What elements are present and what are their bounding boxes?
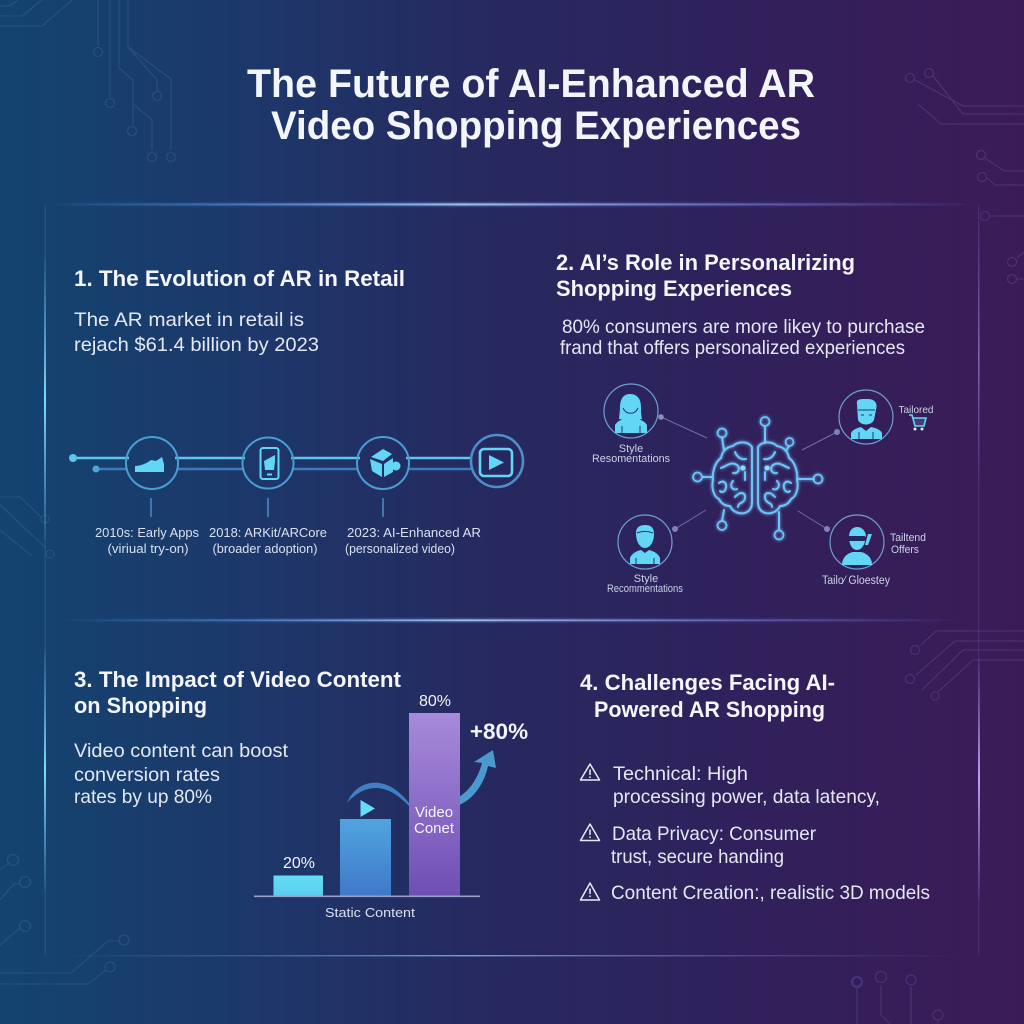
ticks bbox=[151, 498, 383, 517]
label: 2010s: 2010s: Early Apps bbox=[95, 525, 199, 540]
label: style recommendations top: Style bbox=[619, 443, 643, 455]
label: style recommendations top: Resomentations bbox=[592, 453, 670, 465]
value: 20%: 20% bbox=[283, 855, 315, 872]
label: video content: Conet bbox=[414, 820, 455, 837]
bar chart bbox=[254, 693, 528, 920]
text: AR market: rejach $61.4 billion by 2023 bbox=[74, 334, 319, 356]
label: tailored offers bbox=[890, 532, 926, 556]
label: video content: Video bbox=[415, 804, 453, 821]
icon: phone bbox=[260, 448, 278, 479]
bar: 20% bbox=[274, 876, 323, 896]
person: top right bbox=[839, 390, 893, 444]
circuit traces: top right bbox=[906, 68, 1024, 284]
heading 2: 2. AI’s Role in Personalrizing bbox=[556, 250, 855, 275]
label: tailored glossary: Tailo⁄ Gloestey bbox=[822, 575, 890, 587]
title: The Future of AI-Enhanced AR bbox=[247, 62, 815, 106]
heading 4: Powered AR Shopping bbox=[594, 697, 825, 722]
value: 80%: 80% bbox=[419, 693, 451, 710]
label: tailored offers: Tailtend bbox=[890, 532, 926, 544]
challenge: content creation: Content Creation:, realistic 3D models bbox=[611, 882, 930, 904]
label: static content: Static Content bbox=[325, 905, 415, 920]
text: video content: Video content can boost bbox=[74, 740, 289, 762]
panel 1: evolution of AR in retail bbox=[69, 266, 523, 556]
title: Video Shopping Experiences bbox=[271, 104, 801, 148]
heading 3 bbox=[74, 667, 401, 718]
icon: cube bbox=[370, 449, 400, 477]
heading 3: on Shopping bbox=[74, 693, 207, 718]
text: 80% consumers bbox=[560, 316, 925, 359]
label: video content bbox=[414, 804, 455, 837]
brain diagram bbox=[693, 417, 822, 540]
panel frame lines bbox=[44, 204, 980, 956]
text: 80% consumers: 80% consumers are more likey to purchase bbox=[562, 316, 925, 338]
label: tailored cart bbox=[898, 404, 934, 430]
challenge: data privacy bbox=[580, 823, 816, 868]
text: 80% consumers: frand that offers personalized experiences bbox=[560, 337, 905, 359]
bar: middle bbox=[340, 819, 391, 896]
panel 3: impact of video content bbox=[74, 667, 528, 920]
label: 2010s: (viriual try-on) bbox=[108, 541, 188, 556]
connector lines bbox=[658, 414, 840, 532]
challenge: data privacy: Data Privacy: Consumer bbox=[612, 823, 816, 845]
heading 2 bbox=[556, 250, 855, 301]
label: tailored offers: Offers bbox=[891, 544, 919, 556]
challenge: technical: Technical: High bbox=[613, 763, 748, 785]
label: style recommendations bottom: Style bbox=[634, 573, 658, 585]
text: AR market bbox=[74, 309, 319, 356]
panel 2: AI personalization bbox=[556, 250, 934, 595]
icon: play video bbox=[480, 449, 512, 476]
person: bottom left bbox=[618, 515, 672, 569]
bar: 80% bbox=[409, 713, 460, 896]
label: style recommendations bottom: Recommentations bbox=[607, 583, 683, 595]
arrow: curve bbox=[347, 783, 409, 806]
label: 2023: (personalized video) bbox=[345, 541, 455, 556]
person: bottom right bbox=[830, 515, 884, 569]
heading 2: Shopping Experiences bbox=[556, 276, 792, 301]
panel 4: challenges bbox=[580, 670, 930, 904]
label: 2010s bbox=[95, 525, 199, 556]
person: top left bbox=[604, 384, 658, 438]
icon: play bbox=[360, 800, 375, 817]
brain nodes bbox=[693, 417, 822, 540]
text: video content: rates by up 80% bbox=[74, 786, 212, 808]
label: 2018: (broader adoption) bbox=[212, 541, 318, 556]
heading 3: 3. The Impact of Video Content bbox=[74, 667, 401, 692]
circuit traces: top left bbox=[0, 0, 176, 162]
text: video content bbox=[74, 740, 289, 808]
right hemisphere bbox=[758, 442, 798, 513]
icon: shoe bbox=[135, 457, 164, 472]
challenge: technical: processing power, data latency, bbox=[613, 786, 880, 808]
timeline bbox=[69, 435, 523, 556]
label: 2018: 2018: ARKit/ARCore bbox=[209, 525, 327, 540]
label: 2023 bbox=[345, 525, 481, 556]
left hemisphere bbox=[712, 442, 752, 513]
label: 2018 bbox=[209, 525, 327, 556]
challenge: data privacy: trust, secure handing bbox=[611, 846, 784, 868]
label: 2023: 2023: AI-Enhanced AR bbox=[347, 525, 481, 540]
title bbox=[247, 62, 815, 148]
heading 4 bbox=[580, 670, 835, 722]
axis bbox=[254, 896, 480, 897]
arrow: growth bbox=[459, 750, 496, 805]
heading 4: 4. Challenges Facing AI- bbox=[580, 670, 835, 695]
value: +80%: +80% bbox=[470, 719, 528, 744]
heading 1: 1. The Evolution of AR in Retail bbox=[74, 266, 405, 291]
text: video content: conversion rates bbox=[74, 764, 220, 786]
text: AR market: The AR market in retail is bbox=[74, 309, 304, 331]
circuit traces: left middle bbox=[0, 497, 54, 558]
label: style recommendations bottom bbox=[607, 573, 683, 595]
circuit traces: bottom left bbox=[0, 854, 129, 984]
challenge: technical bbox=[580, 763, 880, 808]
label: style recommendations top bbox=[592, 443, 670, 465]
circuit traces: bottom right bbox=[852, 631, 1024, 1024]
label: tailored cart: Tailored bbox=[898, 404, 934, 416]
